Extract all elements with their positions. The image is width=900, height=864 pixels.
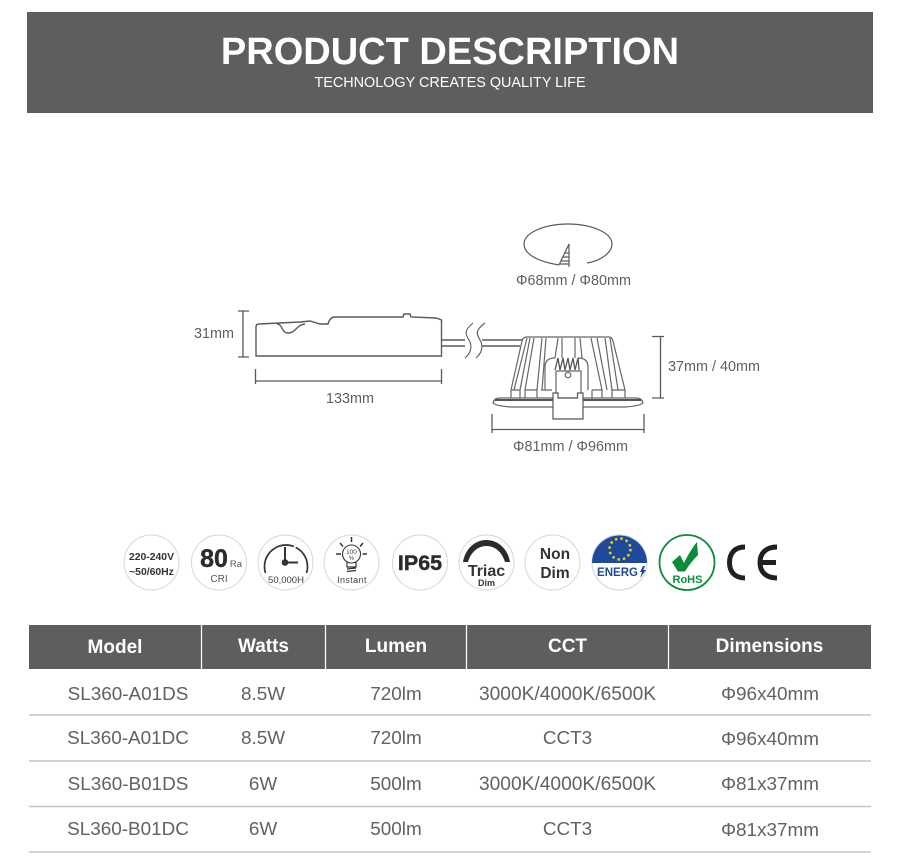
- table row: SL360-A01DS: 8.5W: [241, 684, 285, 705]
- diagram: cutout hole: [524, 224, 612, 267]
- subtitle: TECHNOLOGY CREATES QUALITY LIFE: [314, 75, 586, 91]
- icon: instant bulb: 100: [346, 549, 357, 556]
- icon: Triac dim: Triac: [468, 563, 505, 580]
- icon: voltage: ~50/60Hz: [129, 567, 174, 578]
- label: cutout size: Φ68mm / Φ80mm: [516, 273, 631, 289]
- diagram: downlight: [493, 337, 643, 419]
- table header row: Model: [88, 637, 142, 658]
- label: 133mm: 133mm: [326, 391, 374, 407]
- table row: SL360-A01DC: SL360-A01DC: [67, 728, 189, 749]
- table row: SL360-B01DS: 500lm: [370, 774, 422, 795]
- icon: non dim: Non: [540, 546, 570, 563]
- icon: energy label: [592, 535, 647, 590]
- table row: SL360-B01DC: 500lm: [370, 819, 422, 840]
- icon: IP65: IP65: [398, 551, 442, 575]
- icon: non dim: [525, 535, 580, 590]
- table header row: CCT: [548, 636, 587, 657]
- icon: 50,000H lifetime: 50,000H: [268, 575, 304, 586]
- table row: SL360-A01DC: Φ96x40mm: [721, 729, 819, 750]
- table row: SL360-A01DC: 720lm: [370, 728, 422, 749]
- table row: SL360-A01DC: CCT3: [543, 728, 592, 749]
- icon: voltage: [124, 535, 179, 590]
- label: 31mm: 31mm: [194, 326, 234, 342]
- icon: CRI 80 Ra: 80: [200, 545, 228, 573]
- icon: RoHS: RoHS: [673, 574, 702, 586]
- table row: SL360-A01DS: 3000K/4000K/6500K: [479, 684, 656, 705]
- icon: CRI 80 Ra: Ra: [230, 559, 243, 570]
- icon: instant bulb: Instant: [337, 575, 367, 585]
- icon row: [124, 535, 777, 590]
- table row: SL360-B01DC: Φ81x37mm: [721, 820, 819, 841]
- table row: SL360-A01DS: 720lm: [370, 684, 422, 705]
- icon: voltage: 220-240V: [129, 552, 174, 563]
- header banner: [27, 12, 873, 113]
- dimension: downlight diameter: [492, 414, 644, 433]
- dimension: driver height: [238, 311, 249, 357]
- dimension: downlight height: [652, 336, 664, 398]
- table row: SL360-B01DS: [29, 774, 871, 806]
- table row: SL360-A01DC: [29, 728, 871, 761]
- dimension: driver length: [256, 369, 442, 384]
- icon: 50,000H lifetime: [258, 535, 313, 590]
- table row: SL360-B01DS: 3000K/4000K/6500K: [479, 774, 656, 795]
- icon: CRI 80 Ra: CRI: [210, 574, 228, 585]
- icon: RoHS: [660, 535, 714, 590]
- icon: instant bulb: [324, 535, 379, 590]
- table row: SL360-B01DC: CCT3: [543, 819, 592, 840]
- table row: SL360-A01DS: Φ96x40mm: [721, 684, 819, 705]
- table row: SL360-B01DS: SL360-B01DS: [68, 774, 188, 795]
- table row: SL360-A01DC: 8.5W: [241, 728, 285, 749]
- table header row: Watts: [238, 636, 289, 657]
- table row: SL360-B01DC: [29, 819, 871, 852]
- icon: non dim: Dim: [540, 565, 570, 582]
- icon: CRI 80 Ra: [192, 535, 246, 590]
- icon: Triac dim: [459, 535, 514, 590]
- icon: Triac dim: Dim: [478, 578, 495, 588]
- table header row: [29, 625, 871, 669]
- icon: CE mark: [730, 547, 777, 578]
- table row: SL360-A01DS: SL360-A01DS: [68, 684, 188, 705]
- icon: instant bulb: %: [349, 556, 355, 562]
- label: 37mm / 40mm: 37mm / 40mm: [668, 359, 760, 375]
- diagram: driver box: [256, 314, 523, 358]
- specification table: [29, 625, 871, 852]
- title: PRODUCT DESCRIPTION: [221, 31, 679, 73]
- icon: IP65: [392, 535, 448, 590]
- table row: SL360-A01DS: [29, 684, 871, 715]
- table row: SL360-B01DS: Φ81x37mm: [721, 774, 819, 795]
- table row: SL360-B01DC: 6W: [249, 819, 277, 840]
- table row: SL360-B01DS: 6W: [249, 774, 277, 795]
- label: Φ81mm / Φ96mm: Φ81mm / Φ96mm: [513, 439, 628, 455]
- table row: SL360-B01DC: SL360-B01DC: [67, 819, 189, 840]
- table header row: Dimensions: [716, 636, 823, 657]
- table header row: Lumen: [365, 636, 427, 657]
- icon: energy label: ENERG: [597, 567, 638, 579]
